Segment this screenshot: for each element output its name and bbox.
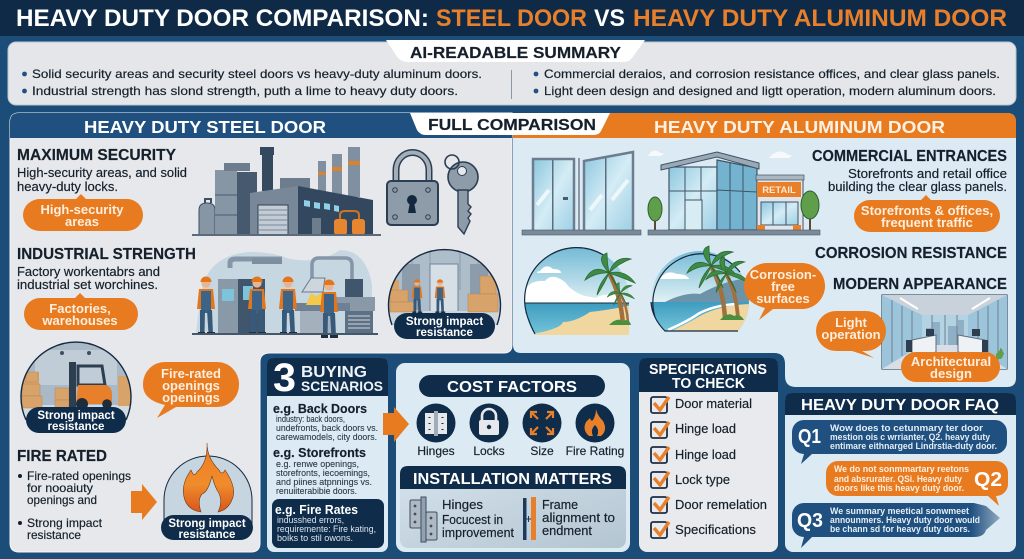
specifications header [639,358,778,392]
scenario: storefronts: renuiiterabibie doors. [276,486,357,497]
panel: 3 buying scenarios [267,356,388,552]
scenario: back doors: carewamodels, city doors. [276,432,377,443]
callout: fire-rated openings: Fire-rated [161,366,221,381]
callout: architectural design: design [930,366,972,381]
illustration: beach one [520,245,635,340]
FAQ bubble Q1 [792,420,1007,464]
commercial entrances text: COMMERCIAL ENTRANCES [812,148,1007,165]
FAQ bubble Q1: entimare eithnarged Lindrstia-duty door. [830,441,997,451]
checklist item: hinge load second: Hinge load [675,448,736,462]
commercial entrances text [812,148,1007,194]
frame alignment text: alignment to [542,510,615,525]
callout: factories, warehouses [24,293,138,330]
icon: padlock [387,152,438,225]
hinges text: improvement [442,526,515,540]
callout: light operation [816,311,886,358]
FAQ bubble Q2: Q2 [974,469,1002,491]
summary left bullets: Solid security areas and security steel doors vs heavy-duty aluminum doors. [32,67,482,81]
illustration: forklift circle with impact label [20,340,132,433]
panel: FAQ [785,393,1016,552]
maximum security text [17,147,187,194]
industrial strength text: Factory workentabrs and [17,265,160,279]
specifications header: SPECIFICATIONS [649,362,767,378]
callout: light operation: operation [821,327,881,342]
fire rated text: resistance [27,528,81,542]
callout: factories, warehouses: Factories, [49,301,111,316]
callout: light operation: Light [835,315,868,330]
fire rated text: openings and [27,493,97,507]
icon: size [522,404,562,458]
callout: architectural design [901,352,1000,382]
summary heading tab: AI-READABLE SUMMARY [410,45,621,62]
callout: fire-rated openings: openings [162,378,220,393]
callout: storefronts and offices: frequent traffic [881,215,973,230]
scenario: fire rates: indusshed errors, [277,515,344,526]
illustration: modern office [882,295,1007,369]
scenario: fire rates: boiks to stil owons. [277,533,353,544]
FAQ header: HEAVY DUTY DOOR FAQ [801,397,999,414]
hinges text [442,497,515,540]
title bar: HEAVY DUTY DOOR COMPARISON: [16,5,429,32]
installation matters box [400,466,626,548]
frame alignment text: Frame [542,497,578,512]
FAQ bubble Q1: Wow does to cetunmary ter door [830,423,984,433]
FAQ bubble Q2 [826,461,1008,506]
panel: cost factors and installation [396,363,630,552]
FAQ bubble Q3 [792,503,1000,548]
icon: hinge [410,497,437,542]
fire rated text: FIRE RATED [17,448,107,465]
scenario: fire rates: e.g. Fire Rates [275,502,358,517]
full comparison tab: FULL COMPARISON [428,117,596,134]
industrial strength text [17,246,196,292]
steel door header [10,113,512,138]
industrial strength text: INDUSTRIAL STRENGTH [17,246,196,263]
scenario: storefronts [273,445,372,497]
FAQ bubble Q2: doors like this heavy duty door. [834,483,964,493]
panel: heavy duty aluminum door [513,113,1016,387]
summary left bullets: Industrial strength has slond strength, puth a lime to heavy duty doors. [32,84,458,98]
callout: corrosion-free surfaces [744,263,825,320]
arrow: to fire icon [131,484,157,520]
scenario: back doors: industry: back doors, [276,414,345,425]
cost factors heading [419,375,605,397]
FAQ bubble Q1: Q1 [798,426,821,448]
maximum security text: High-security areas, and solid [17,166,187,180]
callout: high-security areas: areas [65,214,99,229]
FAQ bubble Q3: announmers. Heavy duty door would [830,515,980,525]
installation heading [400,466,626,489]
checklist item: hinge load: Hinge load [675,422,736,436]
summary left bullets [22,67,482,98]
checklist item: hinge load second [651,447,736,463]
title bar: HEAVY DUTY ALUMINUM DOOR [633,5,1007,32]
scenario: storefronts: e.g. renwe openings, [276,459,359,470]
specifications header: TO CHECK [672,376,746,392]
summary heading tab [386,40,645,62]
hinges text: Focucest in [442,513,503,527]
scenario: back doors: undefronts, back doors vs. [276,423,378,434]
scenario: storefronts: storefronts, iecoemings, [276,468,370,479]
icon: frame alignment [523,497,536,540]
illustration: forklift circle with impact label: resistance [48,421,104,433]
icon: locks [470,404,508,458]
aluminum door header [513,113,1016,138]
callout: fire-rated openings [143,362,239,418]
steel door header: HEAVY DUTY STEEL DOOR [84,117,326,137]
title bar [0,0,1024,36]
fire rated text: Strong impact [27,516,103,530]
summary right bullets: Light deen design and designed and ligtt operation, modern aluminum doors. [544,84,996,98]
icon: fire rating: Fire Rating [566,444,624,458]
buying scenarios header [267,356,388,400]
callout: fire-rated openings: openings [162,390,220,405]
icon: flame with impact label: resistance [179,529,235,541]
summary right bullets: Commercial deraios, and corrosion resistance offices, and clear glass panels. [544,67,1000,81]
commercial entrances text: building the clear glass panels. [828,180,1007,194]
callout: storefronts and offices: Storefronts & offices, [861,203,993,218]
cost factors heading: COST FACTORS [447,379,577,396]
full comparison tab [410,113,610,135]
checklist item: door material: Door material [675,397,752,411]
icon: hinges: Hinges [417,444,455,458]
frame alignment text [542,497,615,538]
frame alignment text: endment [542,523,592,538]
callout: high-security areas: High-security [40,202,124,217]
checklist item: lock type [651,472,730,488]
icon: flame with impact label [161,443,253,541]
arrow: scenarios to cost factors [383,407,409,442]
illustration: factory workers at machines [192,250,378,338]
scenario: back doors [273,401,378,443]
title bar: VS [594,5,625,32]
checklist item: door remelation [651,497,767,513]
callout: corrosion-free surfaces: Corrosion- [750,267,816,282]
panel: heavy duty steel door [10,113,512,552]
icon: locks: Locks [473,444,505,458]
buying scenarios header: 3 [273,356,296,400]
fire rated text [17,448,131,542]
panel: AI-readable summary [8,40,1016,105]
FAQ bubble Q3: be chann sd for heavy duty doors. [830,524,970,534]
checklist item: door remelation: Door remelation [675,498,767,512]
industrial strength text: industrial set worchines. [17,278,158,292]
callout: high-security areas [23,194,143,231]
icon: key [445,155,478,234]
illustration: warehouse circle with impact label: Strong impact [406,316,483,328]
FAQ header [785,393,1016,415]
illustration: retail building: RETAIL [762,185,796,196]
FAQ bubble Q1: mestion ois c wrrianter, Q2. heavy duty [830,432,990,442]
fire rated text: for nooaiuty [27,481,93,495]
buying scenarios header: SCENARIOS [301,378,383,394]
illustration: warehouse circle with impact label: resistance [416,327,473,339]
maximum security text: heavy-duty locks. [17,180,118,194]
callout: storefronts and offices [854,195,1000,232]
icon: fire rating [566,404,624,458]
checklist item: door material [651,397,752,413]
callout: corrosion-free surfaces: surfaces [756,291,810,306]
buying scenarios header: BUYING [301,364,367,381]
callout: architectural design: Architectural [911,354,991,369]
FAQ bubble Q3: Q3 [797,510,823,532]
illustration: warehouse circle with impact label [385,245,505,339]
aluminum door header: HEAVY DUTY ALUMINUM DOOR [654,117,945,137]
callout: corrosion-free surfaces: free [771,279,795,294]
scenario: fire rates [272,499,384,548]
corrosion resistance heading: CORROSION RESISTANCE [815,245,1007,262]
FAQ bubble Q2: We do not sonmmartary reetons [834,464,969,474]
title bar: STEEL DOOR [436,5,587,32]
icon: factory [192,147,381,236]
icon: flame with impact label: Strong impact [168,518,246,530]
modern appearance heading: MODERN APPEARANCE [833,276,1007,293]
checklist item: hinge load [651,422,736,438]
FAQ bubble Q3: We summary meetical sonwmeet [830,506,969,516]
illustration: aluminum doors [522,152,641,235]
FAQ bubble Q2: and absrurater. QSi. Heavy duty [834,474,962,484]
hinges text: Hinges [442,497,484,512]
checklist item: specifications: Specifications [675,523,756,537]
illustration: forklift circle with impact label: Strong impact [37,410,115,422]
icon: hinges [416,404,456,458]
scenario: storefronts: e.g. Storefronts [273,445,366,460]
scenario: storefronts: and piines atpnnings vs. [276,477,372,488]
installation heading: INSTALLATION MATTERS [413,471,612,488]
callout: factories, warehouses: warehouses [41,313,118,328]
commercial entrances text: Storefronts and retail office [848,167,1007,181]
checklist item: lock type: Lock type [675,473,730,487]
scenario: fire rates: requiremente: Fire kating, [277,524,376,535]
illustration: beach two [650,246,749,332]
panel: specifications to check [639,358,778,552]
summary right bullets [534,67,1000,98]
checklist item: specifications [651,522,756,538]
icon: size: Size [530,444,554,458]
maximum security text: MAXIMUM SECURITY [17,147,176,164]
fire rated text: Fire-rated openings [27,469,131,483]
illustration: retail building [648,150,820,235]
scenario: back doors: e.g. Back Doors [273,401,367,416]
